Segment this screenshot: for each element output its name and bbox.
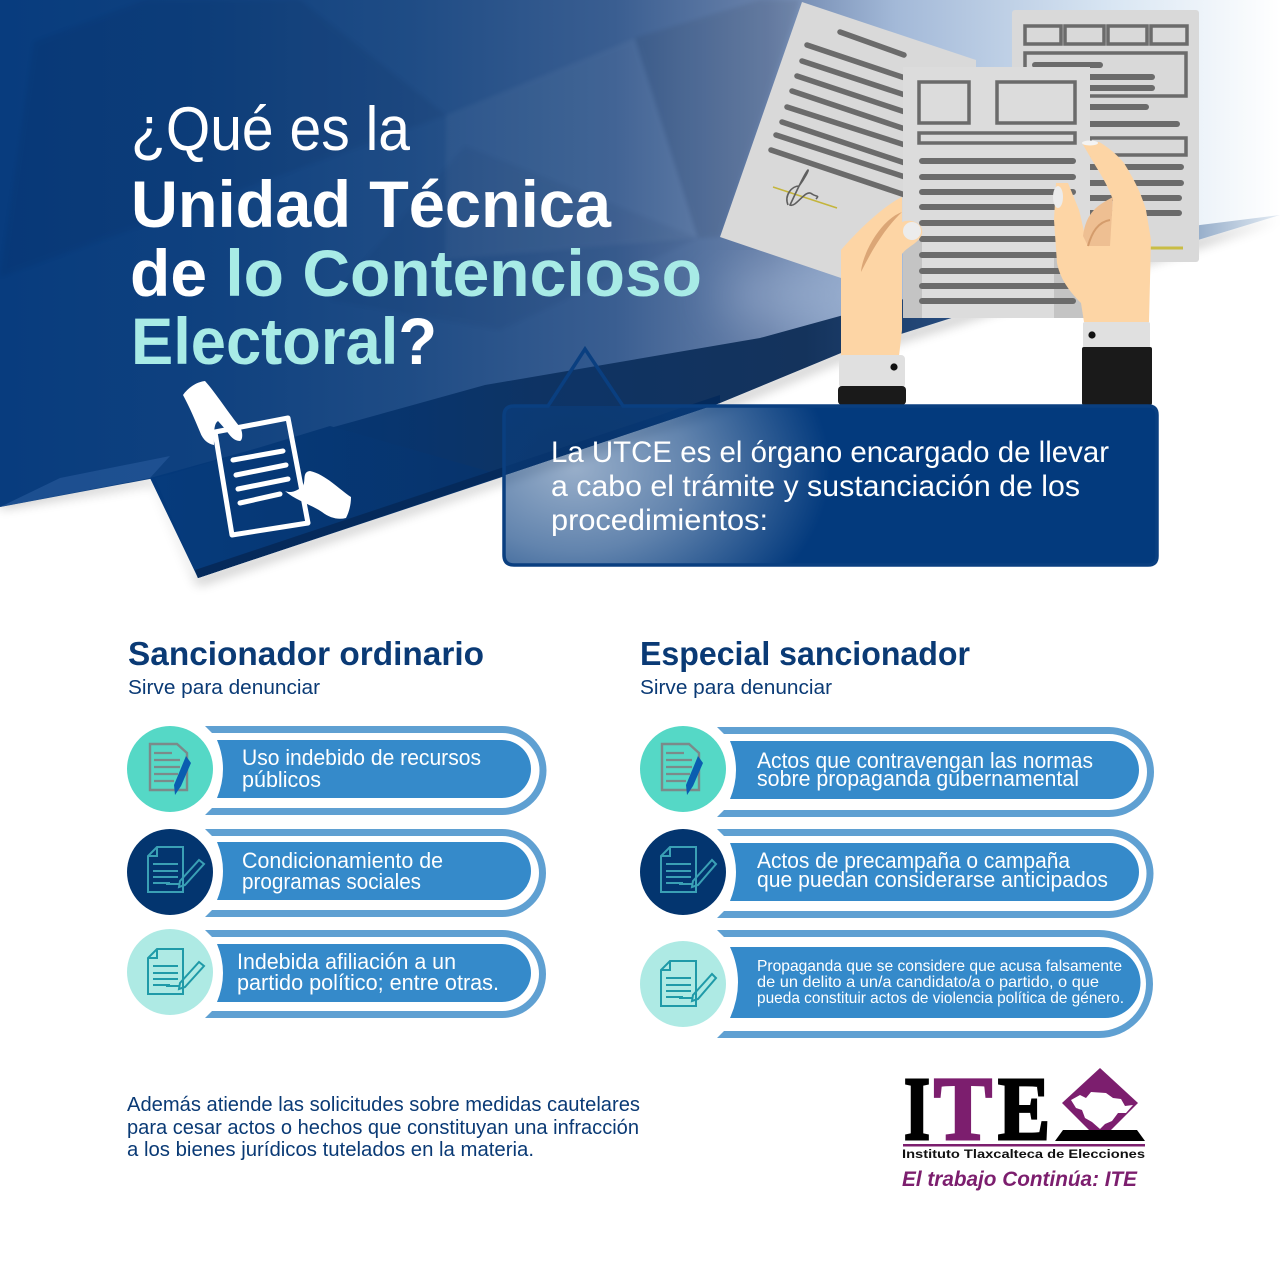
item: Actos que contravengan las normas: Actos que contravengan las normas xyxy=(757,748,1093,773)
icon: document with pen xyxy=(148,949,204,994)
item: Actos de precampaña o campaña: que puedan considerarse anticipados xyxy=(757,867,1108,892)
title: de lo Contencioso xyxy=(130,236,702,310)
footer note: Además atiende las solicitudes sobre medidas cautelares xyxy=(127,1094,640,1116)
document: back right form xyxy=(1012,10,1199,262)
item: Condicionamiento de programas sociales xyxy=(127,829,546,917)
left hand xyxy=(838,197,922,405)
column heading: Especial sancionador xyxy=(640,635,970,699)
callout box xyxy=(504,349,1157,565)
logo: ITE: E xyxy=(998,1060,1050,1159)
column heading: Sancionador ordinario xyxy=(128,635,484,699)
logo: ITE xyxy=(902,1060,1145,1191)
title: ¿Qué es la xyxy=(131,95,410,164)
footer note: para cesar actos o hechos que constituyan una infracción xyxy=(127,1117,639,1139)
header background xyxy=(0,0,1280,584)
signature xyxy=(773,170,837,208)
tag with hand-over-document icon xyxy=(155,381,720,578)
icon: document with pen xyxy=(148,847,204,892)
logo: ITE: Instituto Tlaxcalteca de Elecciones xyxy=(902,1147,1145,1161)
title: Unidad Técnica xyxy=(131,167,612,241)
column heading: Sancionador ordinario: Sancionador ordinario xyxy=(128,635,484,672)
item: Actos de precampaña o campaña xyxy=(640,829,1154,918)
document: front sheet xyxy=(903,67,1090,318)
item: Indebida afiliación a un partido político: Indebida afiliación a un xyxy=(237,949,456,974)
item: Indebida afiliación a un partido político xyxy=(127,929,546,1018)
logo: ITE: T xyxy=(934,1060,992,1159)
right hand xyxy=(1053,140,1152,405)
item: Uso indebido de recursos públicos xyxy=(127,726,546,815)
footer note xyxy=(127,1094,640,1161)
item: Propaganda que se considere xyxy=(640,930,1153,1038)
illustration: hands holding documents xyxy=(720,2,1199,405)
item: Indebida afiliación a un partido político: partido político; entre otras. xyxy=(237,970,499,995)
callout box: a cabo el trámite y sustanciación de los xyxy=(551,470,1080,503)
item: Propaganda que se considere: pueda constituir actos de violencia política de género. xyxy=(757,990,1124,1007)
item: Propaganda que se considere: de un delito a un/a candidato/a o partido, o que xyxy=(757,974,1099,991)
item: Actos que contravengan las normas xyxy=(640,726,1154,817)
item: Uso indebido de recursos públicos: Uso indebido de recursos xyxy=(242,745,481,770)
footer note: a los bienes jurídicos tutelados en la materia. xyxy=(127,1139,534,1161)
callout box: La UTCE es el órgano encargado de llevar xyxy=(551,436,1109,469)
document: signed sheet xyxy=(720,2,976,278)
item: Propaganda que se considere: Propaganda que se considere que acusa falsamente xyxy=(757,958,1122,975)
item: Condicionamiento de programas sociales: Condicionamiento de xyxy=(242,848,443,873)
column heading: Especial sancionador: Especial sancionador xyxy=(640,635,970,672)
icon: document with pen xyxy=(661,961,716,1006)
icon: document with pen xyxy=(661,847,716,892)
icon: document with pen xyxy=(150,744,191,795)
item: Uso indebido de recursos públicos: públicos xyxy=(242,767,321,792)
item: Condicionamiento de programas sociales: programas sociales xyxy=(242,869,421,894)
title: Electoral? xyxy=(131,304,437,378)
callout box: procedimientos: xyxy=(551,504,768,537)
icon: document handover xyxy=(183,381,351,535)
column heading: Especial sancionador: Sirve para denunciar xyxy=(640,676,832,699)
item: Actos de precampaña o campaña: Actos de precampaña o campaña xyxy=(757,848,1071,873)
column heading: Sancionador ordinario: Sirve para denunciar xyxy=(128,676,320,699)
icon: document with pen xyxy=(662,744,703,795)
logo: ITE: I xyxy=(904,1060,930,1159)
title xyxy=(130,95,702,378)
logo: ITE: El trabajo Continúa: ITE xyxy=(902,1168,1138,1191)
icon: ballot box with Tlaxcala map xyxy=(1055,1068,1145,1141)
item: Actos que contravengan las normas: sobre propaganda gubernamental xyxy=(757,766,1079,791)
